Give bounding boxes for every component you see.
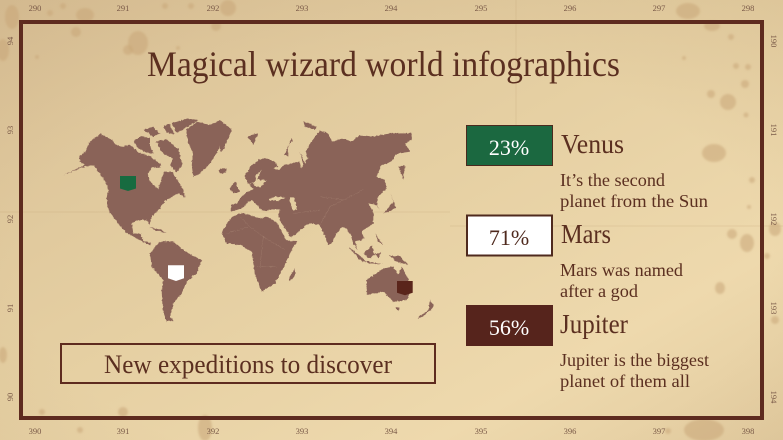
coordinate ticks: 194 [769, 391, 779, 404]
coordinate ticks: 292 [207, 3, 219, 13]
badge: 56%: 56% [489, 315, 529, 340]
coordinate ticks: 193 [769, 302, 779, 314]
item: Jupiter [466, 305, 709, 391]
item: Venus [466, 126, 708, 211]
coordinate ticks: 396 [564, 426, 576, 436]
coordinate ticks: 296 [564, 3, 576, 13]
badge: 23%: 23% [489, 135, 529, 160]
item: Mars [467, 216, 683, 301]
coordinate ticks: 190 [769, 35, 779, 47]
coordinate ticks: 93 [5, 126, 15, 134]
item: Mars: Mars was named [560, 260, 683, 280]
title: Magical wizard world infographics [147, 44, 620, 84]
expeditions box: New expeditions to discover [104, 350, 392, 379]
coordinate ticks: 398 [742, 426, 754, 436]
coordinate ticks: 293 [296, 3, 308, 13]
coordinate ticks: 395 [475, 426, 487, 436]
coordinate ticks: 192 [769, 213, 779, 225]
coordinate ticks: 92 [5, 215, 15, 223]
item: Venus: planet from the Sun [560, 191, 708, 211]
badge: 23% [466, 126, 552, 166]
map: Europe, Asia, Africa, Oceania [220, 120, 434, 318]
item: Mars: after a god [560, 281, 638, 301]
item: Jupiter: Jupiter is the biggest [560, 350, 709, 370]
marker: Australia [397, 281, 413, 295]
coordinate ticks: 291 [117, 3, 129, 13]
coordinate ticks: 90 [5, 393, 15, 401]
coordinate ticks: 94 [5, 36, 15, 45]
coordinate ticks: 294 [385, 3, 398, 13]
map: Americas and Greenland [63, 118, 232, 322]
coordinate ticks: 91 [5, 304, 15, 312]
coordinate ticks: 392 [207, 426, 219, 436]
coordinate ticks: 397 [653, 426, 665, 436]
coordinate ticks: 390 [29, 426, 41, 436]
badge: 56% [466, 305, 553, 346]
world map [63, 118, 434, 322]
item: Jupiter: Jupiter [560, 309, 628, 339]
item: Jupiter: planet of them all [560, 371, 690, 391]
badge: 71%: 71% [489, 225, 529, 250]
coordinate ticks: 393 [296, 426, 308, 436]
coordinate ticks: 290 [29, 3, 41, 13]
coordinate ticks: 298 [742, 3, 754, 13]
item: Venus: It’s the second [560, 170, 665, 190]
expeditions box [61, 344, 435, 383]
coordinate ticks: 394 [385, 426, 398, 436]
coordinate ticks: 297 [653, 3, 665, 13]
coordinate ticks: 391 [117, 426, 129, 436]
badge: 71% [467, 216, 552, 256]
item: Mars: Mars [561, 219, 611, 249]
item: Venus: Venus [561, 129, 624, 159]
marker: North America [120, 176, 136, 191]
coordinate ticks: 295 [475, 3, 487, 13]
marker: South America [168, 265, 184, 281]
coordinate ticks: 191 [769, 124, 779, 136]
